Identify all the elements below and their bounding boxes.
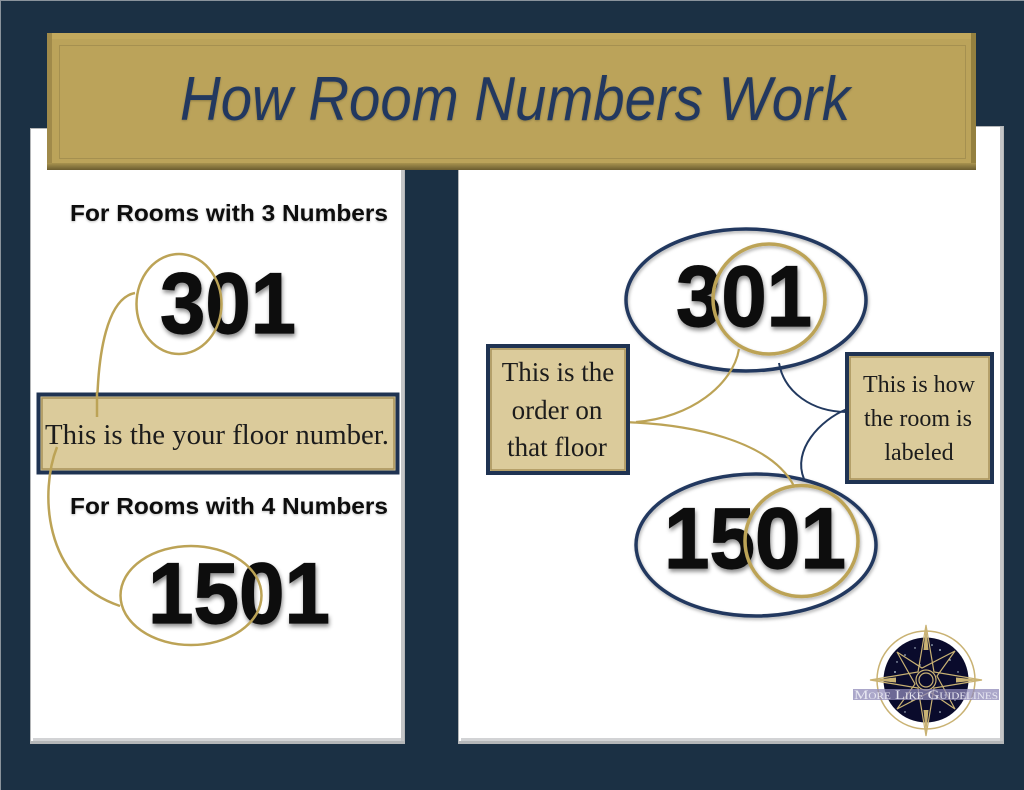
panel: right, number parts: [458, 126, 1004, 744]
callout: floor number: [38, 394, 398, 472]
callout text: This is the your floor number.: [45, 419, 389, 451]
callout: order on that floor: [488, 346, 628, 473]
number: 1501 left: 1501: [148, 546, 330, 642]
callout text: that floor: [507, 432, 607, 462]
highlight: floor digit of 301: [136, 254, 222, 354]
panel: left, rooms explained: [30, 128, 405, 744]
oval: whole 1501: [636, 474, 876, 616]
title text: How Room Numbers Work: [180, 65, 853, 134]
oval: whole 301: [626, 229, 866, 371]
highlight: floor digits of 1501: [120, 546, 262, 645]
callout text: This is the: [502, 357, 614, 387]
connector: floor label up to 301: [96, 392, 98, 417]
callout: how the room is labeled: [847, 354, 992, 482]
callout text: order on: [512, 395, 603, 425]
icon: compass logo: [853, 624, 999, 736]
logo text: More Like Guidelines: [854, 687, 998, 702]
connectors: labeled callout to both ovals: [779, 363, 847, 479]
callout text: labeled: [884, 440, 954, 466]
highlight: order digits of 301: [713, 244, 825, 354]
number: 301 right: 301: [676, 249, 812, 345]
number: 301 left: 301: [160, 256, 296, 352]
callout text: the room is: [864, 406, 972, 432]
heading: 4 number rooms: For Rooms with 4 Numbers: [70, 493, 388, 519]
number: 1501 right: 1501: [664, 491, 846, 587]
connectors: order label to both numbers: [622, 349, 794, 486]
highlight: order digits of 1501: [745, 486, 858, 596]
callout text: This is how: [863, 372, 976, 398]
title banner: [47, 33, 976, 170]
logo band: [853, 689, 999, 700]
connector: floor label to 1501: [48, 447, 120, 606]
heading: 3 number rooms: For Rooms with 3 Numbers: [70, 200, 388, 226]
connector: 301 floor digit to label: [97, 293, 135, 417]
